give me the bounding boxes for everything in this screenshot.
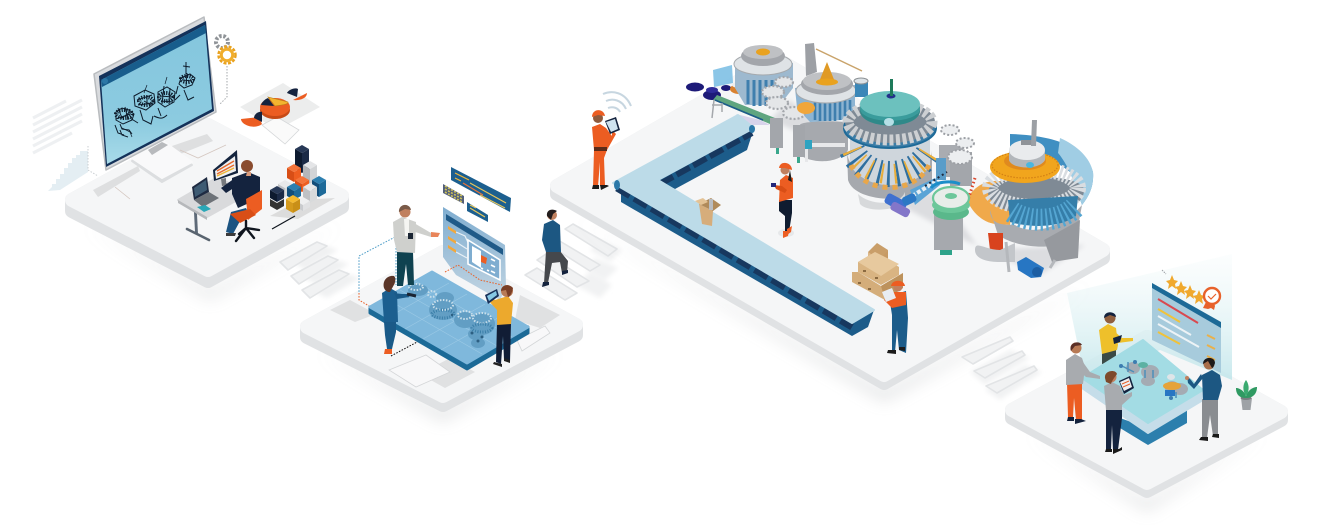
floating code panels [443,167,511,222]
pie charts on pad [240,83,320,144]
floor tiles [330,295,560,388]
desktop computer [213,150,238,186]
carousel B [795,43,868,162]
steps 3 [962,337,1042,400]
platform 1: design desk [72,125,342,298]
person in yellow sweater [1099,312,1133,364]
woman worker with phone [771,163,794,238]
rating stars and medal [1162,270,1220,310]
faint background stats left of monitor [33,100,98,191]
wheel towers [936,125,974,186]
dotted link lines [359,237,502,356]
platform 3: factory floor [557,59,1103,400]
woman holding tool [382,276,416,354]
potted plant [1236,380,1257,410]
person with tablet [1104,371,1134,454]
carousel D [967,120,1093,278]
machine hologram [407,284,495,348]
carousel A [734,45,793,106]
worker in blue overalls [882,281,908,354]
projection table [1082,340,1203,445]
steps 2 [525,224,622,300]
machine shadows [770,100,1085,275]
holographic screen [443,207,506,300]
blue pumps and conveyor [883,172,960,218]
conveyor belt [613,115,874,336]
gears icon [216,36,236,104]
bottling machine line [686,43,1093,278]
transfer wheels [762,77,815,163]
seated designer [221,160,262,241]
monitor stand [132,141,192,182]
desk with computers [178,150,248,240]
green star wheel [932,187,970,255]
report screen [1152,283,1221,373]
man in lab coat [393,205,440,286]
laptop [192,177,219,207]
isometric bar blocks [270,145,335,229]
platform 4: quality review [1012,337,1281,510]
person in grey and orange [1066,342,1100,424]
infeed discs [686,65,775,125]
steps 1 [280,242,360,298]
miniature machine on table [1119,360,1188,400]
box on conveyor [695,198,721,226]
carousel C teal [844,79,936,210]
light glow [1067,254,1232,380]
man in yellow with tablet [485,285,513,367]
stack of cardboard boxes [852,243,903,300]
person in blue sweater [1185,358,1222,441]
large monitor [94,17,216,170]
grey floor pads [93,134,213,197]
holographic table [370,272,528,369]
platform 2: digital twin [307,252,576,420]
worker with wifi tablet [592,92,631,190]
walking man [542,210,568,287]
wireframe machines on monitor [115,62,195,137]
